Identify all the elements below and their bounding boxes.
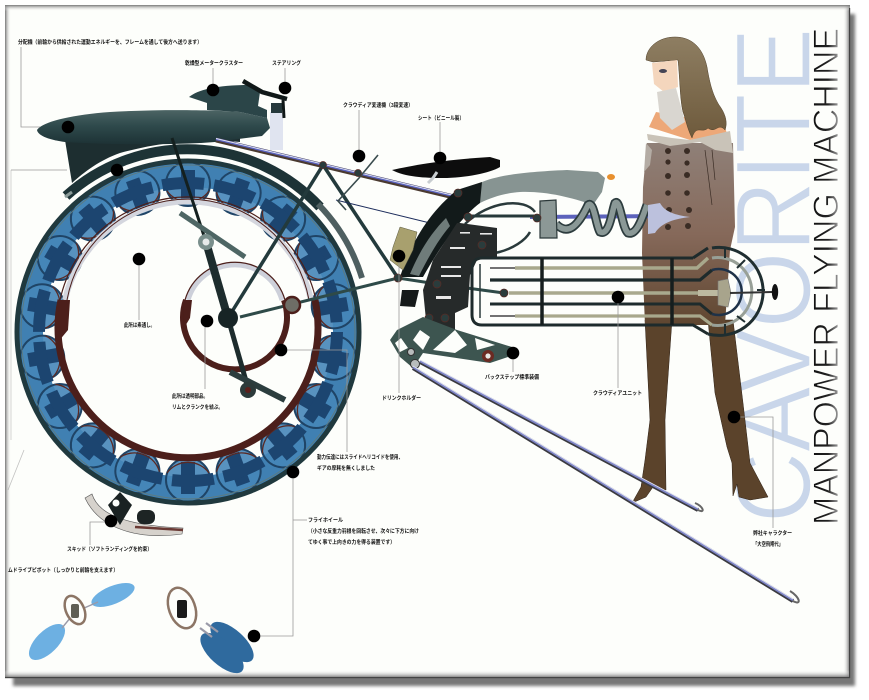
main frame tubes — [172, 138, 504, 400]
backstep truss bracket — [390, 317, 512, 368]
annotation labels — [8, 38, 792, 574]
subtitle: Manpower Flying Machine: MANPOWER FLYING MACHINE — [807, 28, 846, 525]
black mounting plate — [400, 223, 497, 330]
annotation labels: リムとクランクを結ぶ。 — [172, 403, 223, 411]
annotation labels: クラウディア変速機（3段変速） — [343, 101, 413, 109]
flywheel detail: light blue rotor — [23, 578, 138, 666]
annotation labels: 乾燥型メータークラスター — [185, 59, 243, 67]
annotation labels: 此所は透明部品。 — [172, 392, 208, 400]
landing skid — [85, 492, 183, 536]
Claudia unit: tube rack with concentric rings — [472, 247, 778, 335]
corkscrew screw shaft — [465, 200, 690, 254]
annotation labels: 弊社キャラクター — [753, 529, 792, 537]
annotation labels: ステアリング — [272, 59, 301, 67]
annotation labels: スキッド（ソフトランディングを約束） — [67, 545, 152, 553]
frame joint bolts — [320, 162, 541, 322]
annotation labels: てゆく事で上向きの力を得る装置です） — [308, 538, 395, 546]
annotation labels: 此所は素通し。 — [124, 321, 155, 329]
annotation labels: 動力伝達にはスライドヘリコイドを使用、 — [317, 453, 403, 461]
annotation labels: フライホイール — [308, 517, 343, 524]
seat — [392, 157, 500, 183]
annotation labels: 分配機（前輪から供給された運動エネルギーを、フレームを通して後方へ送ります） — [18, 38, 202, 46]
annotation labels: ドリンクホルダー — [382, 394, 421, 402]
annotation labels: ムドライブピボット（しっかりと前輪を支えます） — [8, 566, 118, 574]
annotation labels: クラウディアユニット — [593, 389, 642, 397]
drink holder — [390, 227, 417, 270]
crank hubs — [198, 234, 300, 398]
annotation labels: ギアの摩耗を無くしました — [317, 464, 375, 472]
marker dots — [62, 82, 740, 642]
flywheel detail: dark blue rotor — [163, 584, 260, 680]
rear fender with lamp — [400, 170, 615, 277]
character: girl in brown coat — [632, 37, 768, 503]
annotation labels: シート（ビニール製） — [418, 114, 464, 122]
annotation labels: 「大空飛翔代」 — [753, 540, 783, 548]
front fender — [65, 149, 362, 278]
title: CAVORITE: CAVORITE — [713, 28, 833, 523]
annotation labels: （小さな反重力羽根を回転させ、次々に下方に向け — [308, 527, 419, 535]
meter cluster — [189, 85, 267, 118]
small crank ring — [183, 262, 287, 369]
annotation labels: バックステップ標準装備 — [485, 373, 539, 381]
cowling and rear shroud — [37, 110, 270, 183]
long landing rods — [413, 360, 799, 602]
front wheel: flywheel rotor — [16, 161, 360, 503]
steering column and handlebar — [243, 81, 287, 150]
leader lines — [8, 47, 773, 636]
